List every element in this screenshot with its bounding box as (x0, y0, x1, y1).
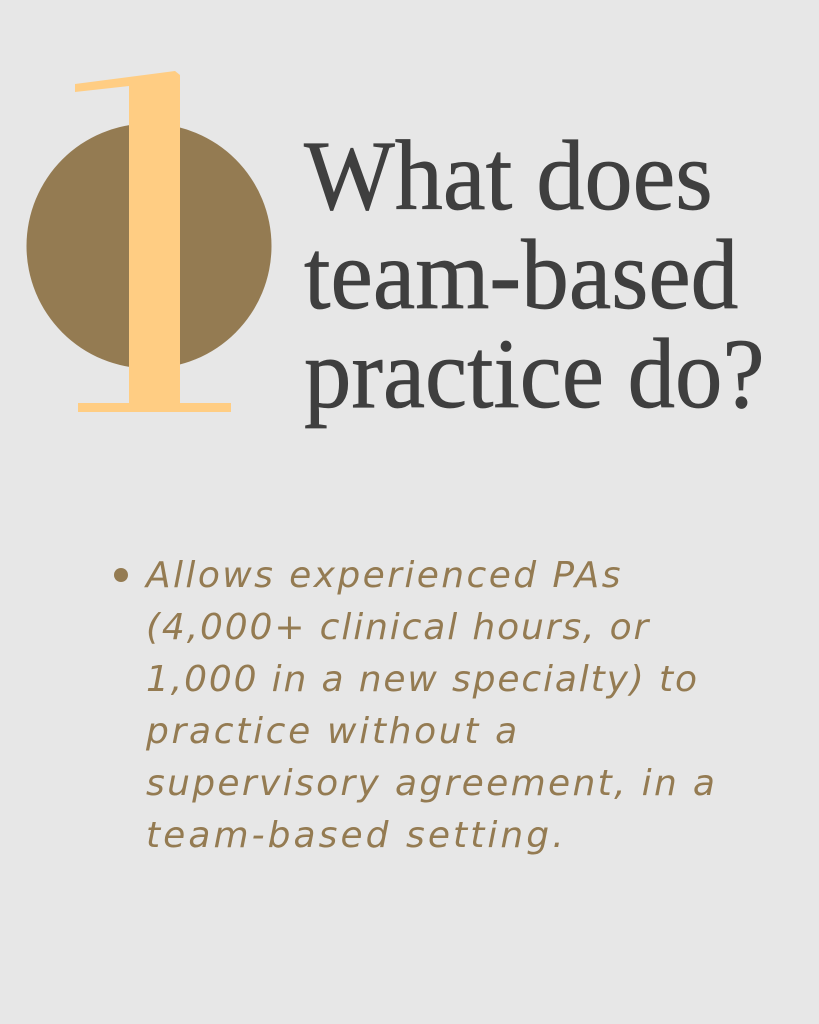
bullet text (144, 555, 717, 856)
bullet text: team-based setting. (146, 815, 567, 856)
bullet text: supervisory agreement, in a (146, 763, 717, 804)
title (304, 120, 765, 429)
icon: numeral one over circle (26, 71, 272, 412)
title: What does (304, 120, 713, 231)
title: team-based (304, 219, 738, 330)
bullet text: practice without a (146, 711, 520, 752)
bullet text: Allows experienced PAs (146, 555, 623, 596)
bullet text: 1,000 in a new specialty) to (146, 659, 699, 700)
bullet dot (114, 568, 128, 582)
title: practice do? (304, 318, 765, 429)
bullet text: (4,000+ clinical hours, or (146, 607, 650, 648)
